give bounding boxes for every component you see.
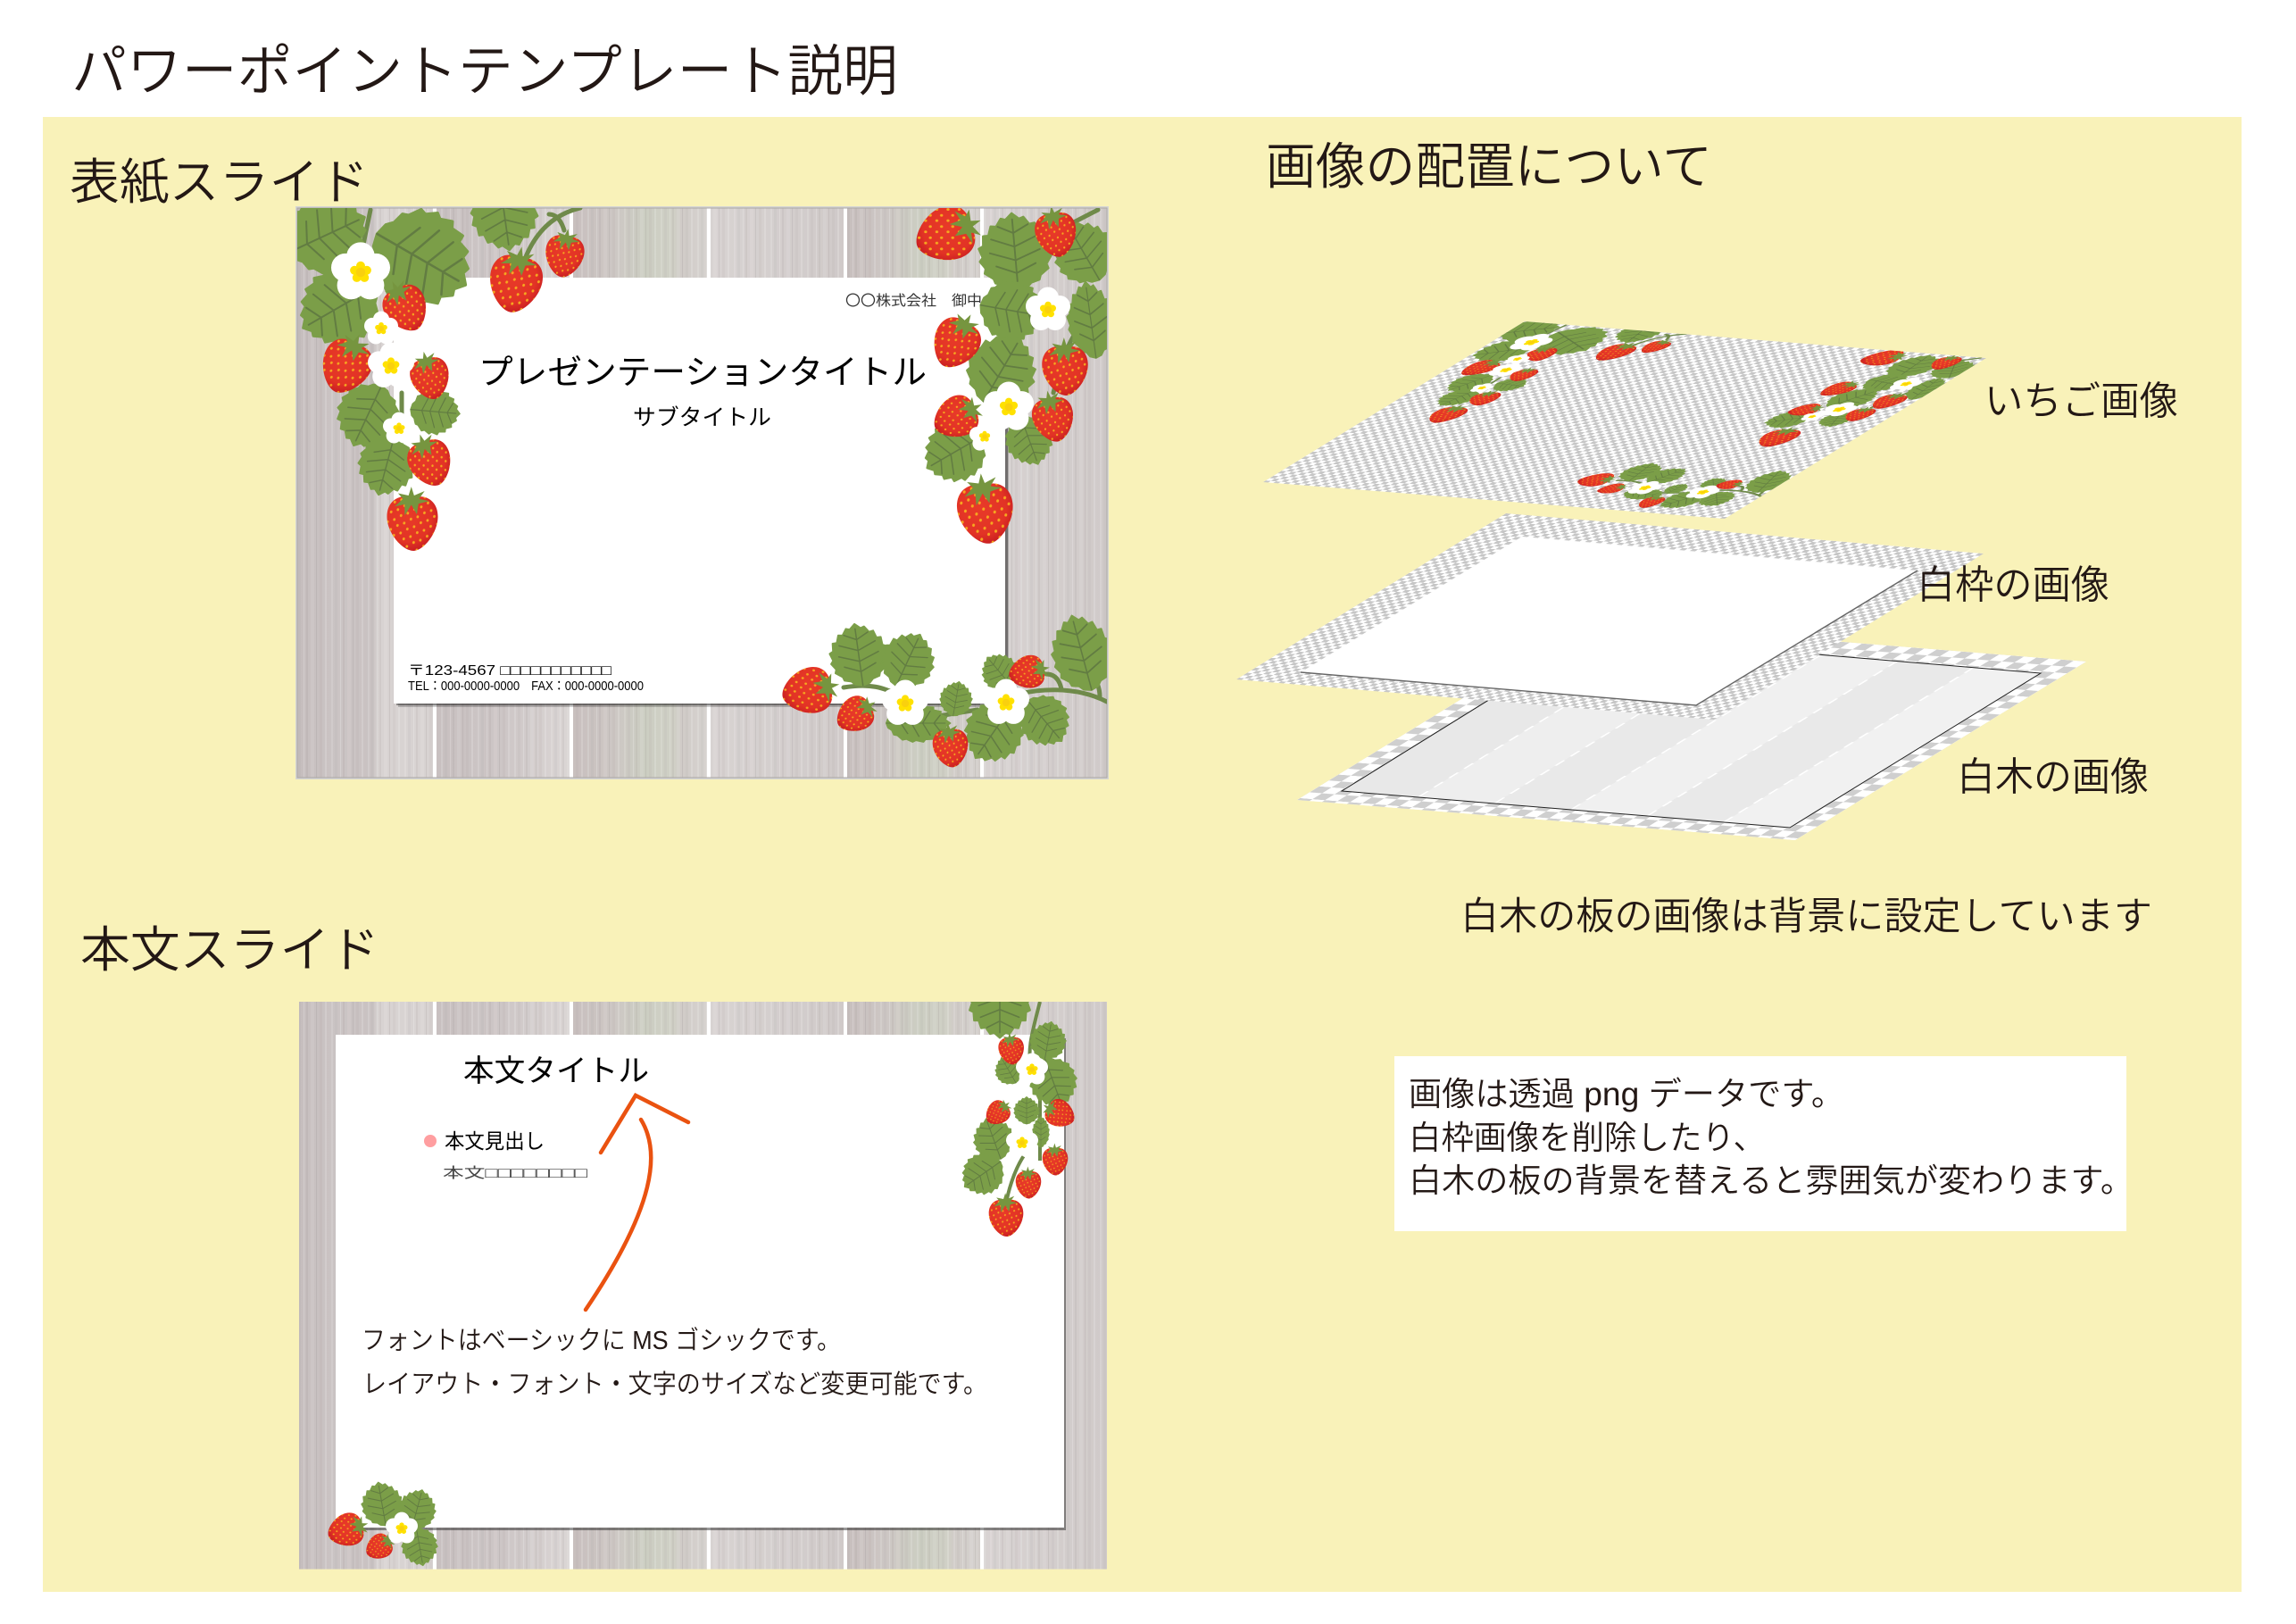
panel: cover slide [274, 175, 1125, 779]
layer: white wood [1297, 621, 2086, 840]
label: white frame image: 白枠の画像 [1917, 563, 2109, 607]
bullet dot [424, 1135, 437, 1147]
postal address: 〒123-4567 □□□□□□□□□□□ [408, 663, 611, 679]
layout note: レイアウト・フォント・文字のサイズなど変更可能です。 [362, 1370, 987, 1399]
layer: strawberries [1253, 312, 2011, 519]
main title: パワーポイントテンプレート説明 [71, 41, 898, 103]
body heading: 本文見出し [445, 1129, 545, 1153]
heading: image placement: 画像の配置について [1266, 138, 1712, 195]
font note: フォントはベーシックに MS ゴシックです。 [362, 1326, 841, 1355]
label: strawberry image: いちご画像 [1984, 379, 2178, 423]
layer: white frame [1236, 513, 1984, 720]
note line 2: 白枠画像を削除したり、 [1409, 1120, 1766, 1156]
addressee: 〇〇株式会社 御中 [845, 293, 982, 309]
strawberry artwork [274, 175, 1125, 774]
label: white wood image: 白木の画像 [1957, 755, 2149, 799]
note: background setting: 白木の板の画像は背景に設定しています [1460, 895, 2152, 938]
strawberry sprig top right [962, 1002, 1077, 1237]
panel: body slide [297, 972, 1107, 1570]
heading: body slide: 本文スライド [80, 922, 379, 978]
strawberry sprig bottom left [329, 1482, 438, 1566]
heading: cover slide: 表紙スライド [70, 154, 369, 210]
note line 3: 白木の板の背景を替えると雰囲気が変わります。 [1409, 1162, 2134, 1199]
note line 1: 画像は透過 png データです。 [1409, 1076, 1844, 1112]
white frame [336, 1035, 1066, 1530]
slide title: 本文タイトル [463, 1054, 649, 1088]
arrow [586, 1095, 688, 1310]
diagram: exploded layers [1236, 312, 2086, 840]
white frame [394, 278, 1009, 707]
phone and fax: TEL：000-0000-0000 FAX：000-0000-0000 [408, 679, 644, 694]
body placeholder: 本文□□□□□□□□ [443, 1165, 587, 1181]
callout: transparency note [1394, 1056, 2134, 1231]
slide title: プレゼンテーションタイトル [478, 354, 927, 392]
slide subtitle: サブタイトル [633, 405, 771, 430]
